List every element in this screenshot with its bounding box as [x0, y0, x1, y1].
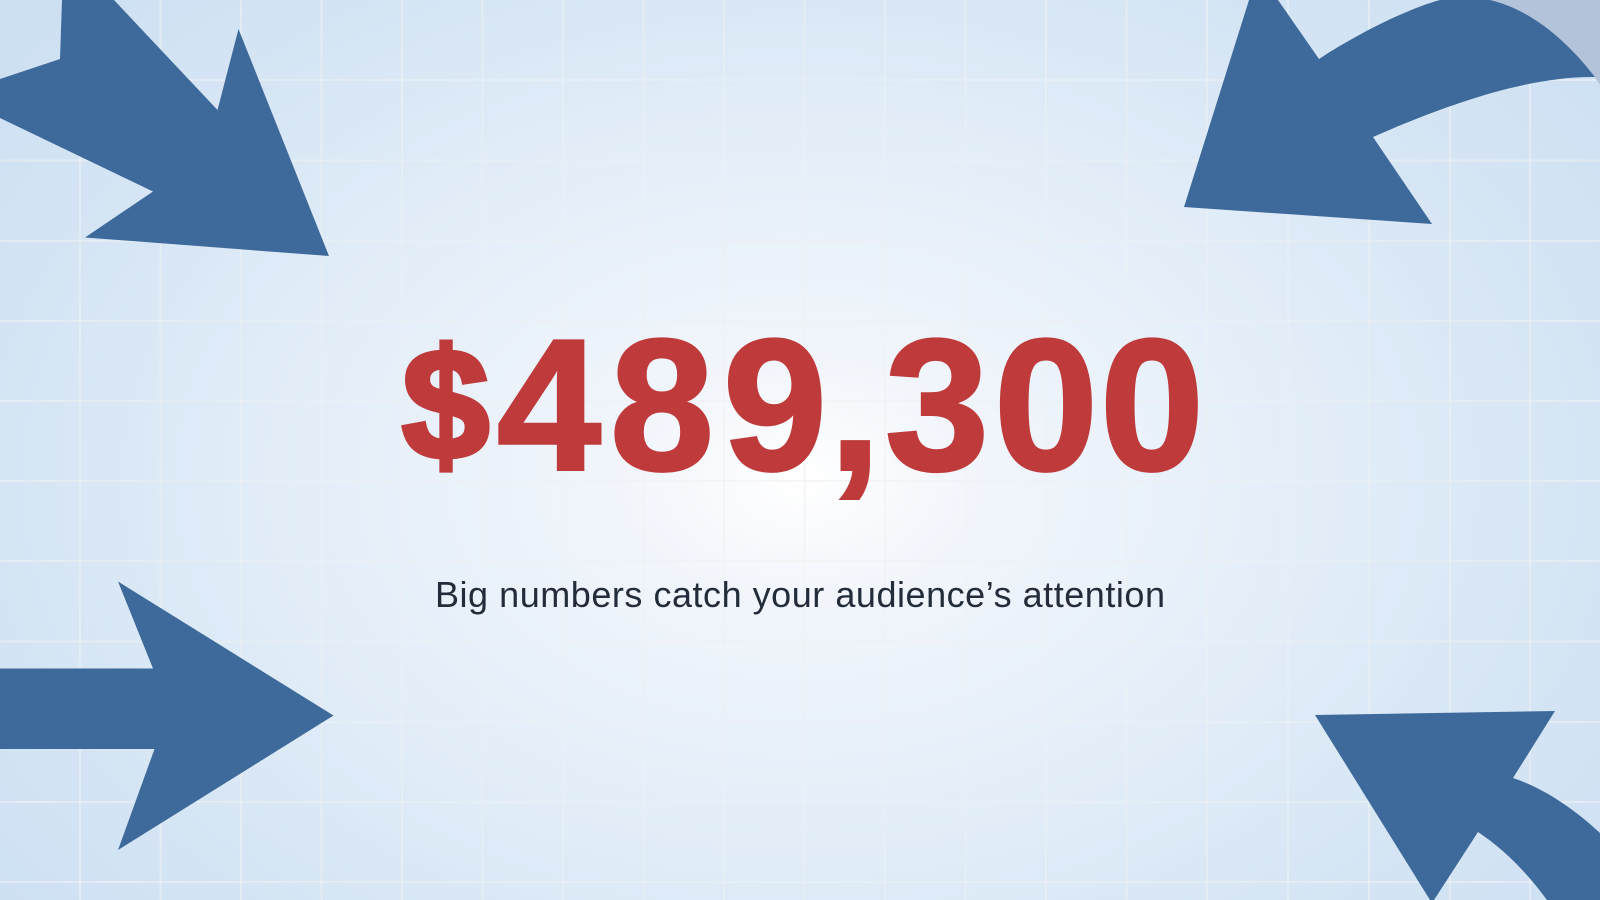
- subtitle: Big numbers catch your audience’s attention: [435, 574, 1165, 615]
- big number: 489,300: [497, 300, 1204, 510]
- arrow: bottom left: [0, 582, 334, 850]
- big number: $: [402, 318, 489, 492]
- arrow: top right: [1184, 0, 1595, 224]
- arrow: top left: [0, 0, 329, 256]
- arrow: bottom right: [1315, 711, 1600, 900]
- corner shade: top right: [1478, 0, 1600, 85]
